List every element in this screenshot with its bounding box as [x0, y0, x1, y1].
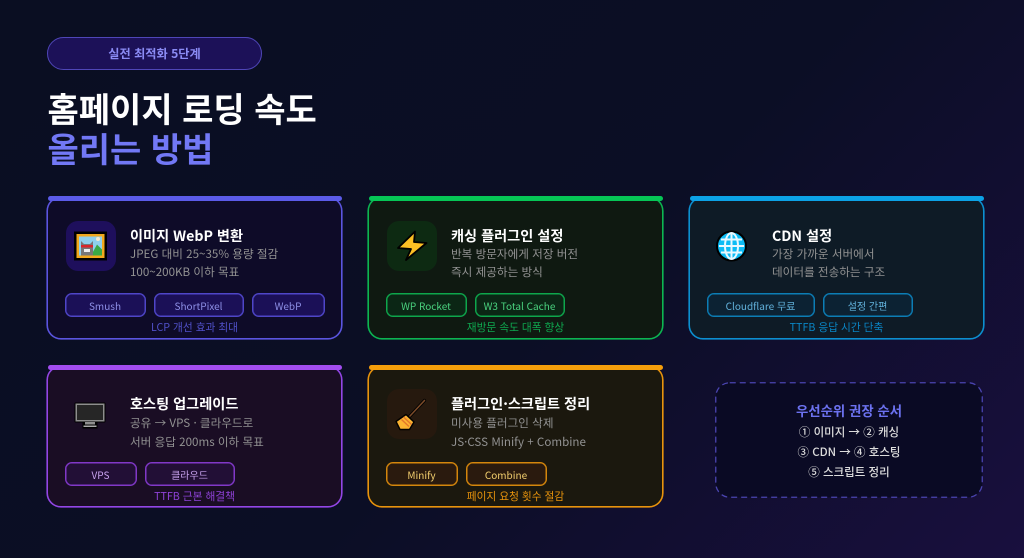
callout list [797, 424, 901, 480]
top bar [690, 196, 984, 201]
chip: W3 Total Cache [484, 298, 555, 312]
icon: lightning bolt [386, 220, 436, 270]
title: 올리는 방법 [48, 123, 213, 172]
callout list: ⑤ 스크립트 정리 [808, 464, 890, 480]
chip: 설정 간편 [848, 298, 887, 312]
chip: Minify [407, 466, 436, 482]
description: 가장 가까운 서버에서 [772, 246, 874, 262]
panel: hosting upgrade [47, 366, 342, 507]
chip [386, 462, 458, 486]
card title: 이미지 WebP 변환 [130, 226, 243, 246]
card title: CDN 설정 [772, 226, 832, 246]
footnote: TTFB 근본 해결책 [154, 489, 235, 504]
top bar [48, 196, 342, 201]
chip [466, 462, 546, 486]
callout list: ③ CDN → ④ 호스팅 [797, 444, 901, 460]
description: JS·CSS Minify + Combine [451, 434, 586, 450]
description: 반복 방문자에게 저장 버전 [451, 246, 578, 262]
card title: 플러그인·스크립트 정리 [451, 394, 590, 414]
card title: 캐싱 플러그인 설정 [451, 226, 563, 246]
top bar [369, 196, 663, 201]
chip: Cloudflare 무료 [726, 298, 795, 312]
title [48, 83, 317, 172]
callout heading: 우선순위 권장 순서 [796, 400, 902, 420]
chip [252, 292, 324, 316]
panel: CDN [689, 197, 984, 338]
description: 100~200KB 이하 목표 [130, 264, 239, 280]
icon: broom [386, 389, 436, 439]
top bar [48, 365, 342, 370]
title: 홈페이지 로딩 속도 [48, 83, 317, 132]
footnote: LCP 개선 효과 최대 [151, 320, 238, 334]
chip: WebP [275, 298, 301, 312]
chip [64, 292, 146, 316]
icon: monitor [74, 402, 106, 428]
callout: priority order [715, 382, 983, 498]
card title: 호스팅 업그레이드 [130, 394, 238, 414]
chip: VPS [92, 466, 109, 482]
description: 서버 응답 200ms 이하 목표 [130, 434, 264, 450]
panel: plugin and script cleanup [368, 366, 663, 507]
chip [64, 462, 136, 486]
chip [386, 292, 466, 316]
description: 공유 → VPS · 클라우드로 [130, 414, 253, 430]
top bar [369, 365, 663, 370]
panel: caching plugin [368, 197, 663, 338]
description: 미사용 플러그인 삭제 [451, 414, 554, 430]
chip [144, 462, 234, 486]
chip: ShortPixel [174, 298, 222, 312]
chip [822, 292, 912, 316]
chip: Smush [89, 298, 121, 312]
icon: framed picture [66, 220, 116, 270]
chip: 클라우드 [171, 466, 208, 482]
footnote: 재방문 속도 대폭 향상 [467, 320, 564, 334]
footnote: TTFB 응답 시간 단축 [790, 320, 883, 334]
chip: WP Rocket [401, 298, 451, 312]
description: 즉시 제공하는 방식 [451, 264, 543, 280]
description: JPEG 대비 25~35% 용량 절감 [130, 246, 278, 262]
footnote: 페이지 요청 횟수 절감 [467, 489, 564, 504]
icon: globe [716, 230, 747, 262]
chip [706, 292, 814, 316]
chip [474, 292, 564, 316]
badge: 실전 최적화 5단계: 실전 최적화 5단계 [108, 44, 201, 62]
badge: 실전 최적화 5단계 [47, 37, 262, 70]
chip: Combine [485, 466, 527, 482]
description: 데이터를 전송하는 구조 [772, 264, 885, 280]
callout list: ① 이미지 → ② 캐싱 [799, 424, 899, 440]
chip [154, 292, 244, 316]
panel: image WebP [47, 197, 342, 338]
